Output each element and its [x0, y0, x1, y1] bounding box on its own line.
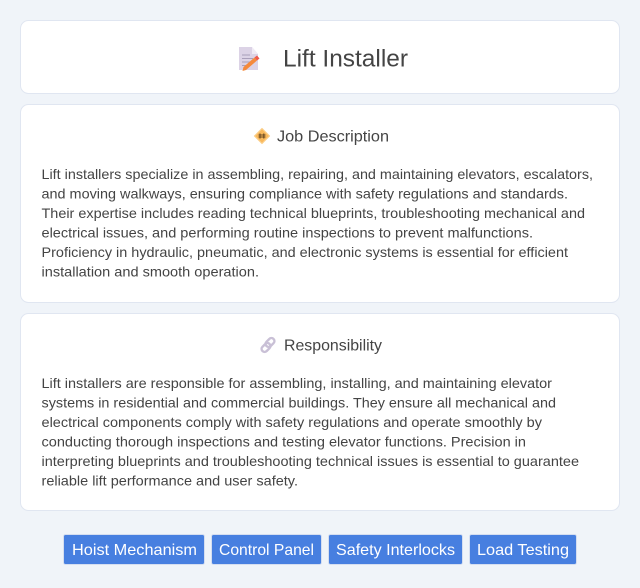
text block: responsibility: systems in residential and commercial buildings. They ensure all mechanical and — [42, 394, 556, 410]
tag: load testing — [470, 534, 576, 564]
icon: document with pencil — [239, 47, 260, 71]
icon: warning diamond — [254, 128, 270, 144]
text block: responsibility: conducting thorough inspections and testing elevator functions. Precision in — [42, 434, 526, 450]
tag: load testing: Load Testing — [477, 542, 569, 559]
tags row — [64, 534, 576, 564]
heading: responsibility: Responsibility — [284, 338, 382, 354]
tag: control panel — [212, 534, 322, 564]
tag: safety interlocks: Safety Interlocks — [336, 542, 455, 559]
panel: job description — [20, 104, 620, 302]
panel: title card — [20, 20, 620, 94]
text block: responsibility — [42, 375, 579, 488]
tag: control panel: Control Panel — [219, 542, 314, 559]
text block: job description: electrical issues, and performing routine inspections to prevent malfunctions. — [42, 224, 533, 240]
tag: hoist mechanism: Hoist Mechanism — [72, 542, 197, 559]
text block: job description: Proficiency in hydraulic, pneumatic, and electronic systems is essential for efficient — [42, 244, 568, 260]
text block: job description — [42, 166, 593, 280]
text block: responsibility: interpreting blueprints and troubleshooting technical issues is essential to guarantee — [42, 453, 579, 469]
text block: job description: Their expertise includes reading technical blueprints, troubleshooting mechanical and — [42, 205, 585, 221]
title: Lift Installer — [283, 46, 408, 72]
panel: responsibility — [20, 314, 620, 510]
text block: job description: installation and smooth operation. — [42, 264, 259, 280]
tag: safety interlocks — [328, 534, 462, 564]
text block: job description: and moving walkways, ensuring compliance with safety regulations and standards. — [42, 186, 568, 202]
text block: responsibility: reliable lift performance and user safety. — [42, 472, 298, 488]
heading: job description: Job Description — [277, 128, 389, 146]
text block: responsibility: Lift installers are responsible for assembling, installing, and maintaining elevator — [42, 375, 552, 391]
tag: hoist mechanism — [64, 534, 204, 564]
text block: responsibility: electrical components comply with safety regulations and operate smoothly by — [42, 414, 542, 430]
icon: chain link — [260, 337, 276, 353]
text block: job description: Lift installers specialize in assembling, repairing, and maintaining elevators, escalators, — [42, 166, 593, 182]
